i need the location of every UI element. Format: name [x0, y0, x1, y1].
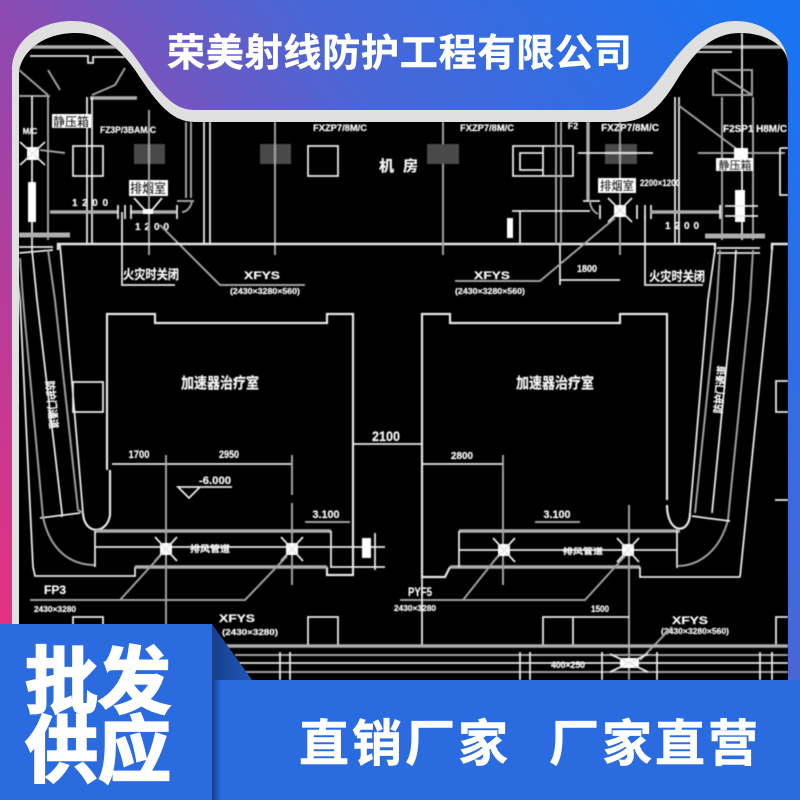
lower equipment band	[73, 617, 788, 680]
upper left duct and valve	[50, 110, 338, 285]
central machine room: FXZP7/8M/C	[313, 123, 368, 133]
left ramp corridor	[14, 245, 135, 576]
upper right equipment lines: 静压箱	[718, 158, 752, 172]
upper left labels: 排烟室	[130, 181, 166, 196]
wholesale supply text: 批发	[25, 642, 171, 723]
upper right duct and valve	[455, 122, 720, 296]
lower leader lines and labels: 1500	[591, 604, 609, 614]
central machine room: FXZP7/8M/C	[460, 123, 515, 133]
right treatment room: 排风管道	[563, 546, 603, 556]
slogan right: 厂家直营	[549, 716, 761, 772]
left ramp corridor: 防护门通道	[43, 380, 61, 429]
left room star fixtures	[155, 533, 385, 570]
upper right duct and valve: 火灾时关闭	[649, 269, 705, 284]
lower leader lines and labels: 2430×3280	[394, 604, 437, 613]
left treatment room	[81, 312, 386, 624]
left treatment room: 3.100	[312, 509, 340, 521]
central dimension	[353, 428, 422, 444]
right ramp corridor: 防护门通道	[711, 365, 729, 414]
lower equipment band: 400×250	[551, 660, 585, 670]
upper left labels: 火灾时关闭	[123, 267, 179, 282]
central machine room: 机房	[379, 157, 427, 175]
central machine room: FXZP7/8M/C	[601, 123, 659, 134]
left treatment room: -6.000	[199, 475, 231, 487]
left treatment room: 排风管道	[190, 543, 230, 554]
header title: 荣美射线防护工程有限公司	[167, 33, 633, 75]
lower leader lines and labels: XFYS	[219, 613, 255, 625]
right treatment room: 加速器治疗室	[516, 374, 594, 392]
upper left equipment lines	[19, 47, 137, 253]
lower leader lines and labels: PYF5	[408, 585, 432, 599]
upper right duct and valve: 排烟室	[600, 178, 634, 193]
wholesale supply text: 供应	[25, 711, 171, 792]
upper right duct and valve: 1 2 0 0	[665, 221, 699, 232]
central dimension: 2100	[372, 428, 400, 444]
lower leader lines and labels: (2430×3280)	[222, 628, 278, 637]
right ramp corridor	[677, 250, 788, 577]
bottom banner: fold shadow	[212, 624, 252, 680]
left treatment room: 1700	[128, 449, 150, 461]
upper left labels: 1 2 0 0	[72, 198, 108, 209]
lower leader lines and labels	[30, 556, 729, 660]
upper left labels: 静压箱	[53, 114, 89, 129]
right treatment room: 2800	[451, 451, 473, 462]
left treatment room: 加速器治疗室	[181, 374, 259, 392]
upper right duct and valve: 2200×1200	[640, 178, 680, 188]
upper left labels: M/C	[23, 127, 38, 136]
upper left labels: XFYS	[244, 270, 280, 282]
upper right duct and valve: XFYS	[474, 270, 510, 282]
upper left labels: (2430×3280×560)	[230, 287, 300, 296]
upper right equipment lines: F2SP1 H8M/C	[723, 124, 787, 135]
bottom banner: shadow strip	[212, 680, 221, 800]
upper left labels: 1 2 0 0	[135, 222, 169, 233]
upper right duct and valve: (2430×3280×560)	[455, 287, 525, 296]
main horizontal wall	[58, 244, 788, 250]
lower leader lines and labels: (2430×3280×560)	[661, 627, 729, 636]
upper left labels: FZ3P/3BAM/C	[100, 125, 156, 135]
bottom banner: left block	[0, 624, 212, 800]
right treatment room: 3.100	[544, 509, 570, 521]
upper right duct and valve: 1800	[577, 264, 597, 275]
wholesale supply text	[25, 642, 171, 792]
lower leader lines and labels: FP3	[44, 583, 66, 597]
upper right equipment lines	[675, 33, 788, 253]
central machine room	[313, 121, 659, 255]
lower leader lines and labels: 2430×3280	[34, 605, 77, 614]
slogan left: 直销厂家	[299, 716, 511, 772]
right treatment room	[422, 314, 740, 680]
central machine room: F2	[568, 121, 578, 131]
upper left labels	[23, 114, 300, 296]
bottom banner: right bar	[212, 680, 800, 800]
left treatment room: 2950	[219, 449, 239, 461]
lower leader lines and labels: XFYS	[672, 615, 708, 627]
blueprint drawing	[14, 33, 788, 680]
